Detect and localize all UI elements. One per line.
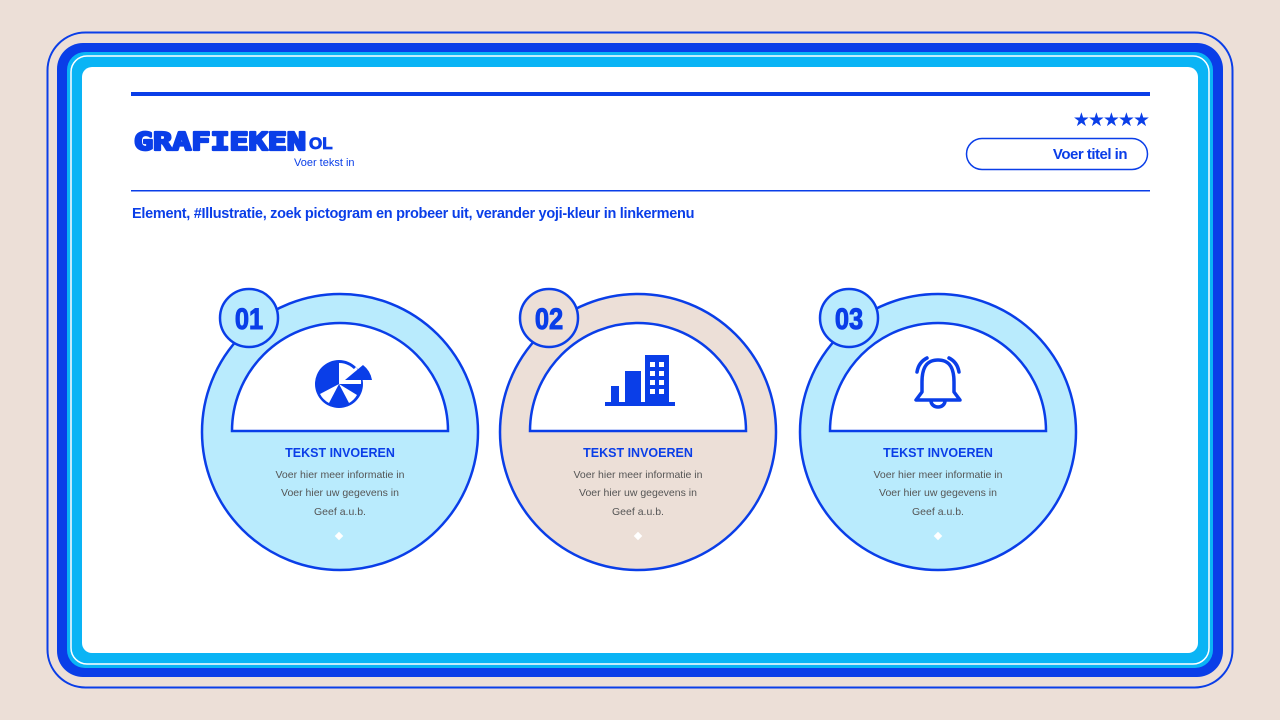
icon: bell [916,358,960,407]
icon: pie chart [315,360,372,408]
title: GRAFIEKEN [134,127,306,156]
title button [966,138,1148,170]
panel 3: Geef a.u.b. [912,506,964,518]
panel 1: TEKST INVOEREN [285,446,395,460]
panel 2 [500,289,776,570]
panel 2: Geef a.u.b. [612,506,664,518]
badge 03 [820,289,878,347]
badge 03: 03 [835,302,863,335]
description: Element, #Illustratie, zoek pictogram en probeer uit, verander yoji-kleur in linkermenu [132,206,694,222]
badge 02 [520,289,578,347]
panel 3: TEKST INVOEREN [883,446,993,460]
panel 2: TEKST INVOEREN [583,446,693,460]
icon: buildings [605,355,675,406]
title: OL [309,134,333,153]
badge 01: 01 [235,302,263,335]
subtitle: Voer tekst in [294,157,355,169]
panel 2: Voer hier uw gegevens in [579,487,697,499]
panel 3: Voer hier meer informatie in [874,469,1003,481]
panel 1 [202,289,478,570]
title [134,127,333,156]
panel 3: Voer hier uw gegevens in [879,487,997,499]
badge 01 [220,289,278,347]
panel 2: Voer hier meer informatie in [574,469,703,481]
panel 1: Voer hier uw gegevens in [281,487,399,499]
panel 3 [800,289,1076,570]
stars: ★★★★★ [1073,109,1149,131]
badge 02: 02 [535,302,563,335]
panel 1: Geef a.u.b. [314,506,366,518]
panel 1: Voer hier meer informatie in [276,469,405,481]
title button: Voer titel in [1053,146,1127,163]
